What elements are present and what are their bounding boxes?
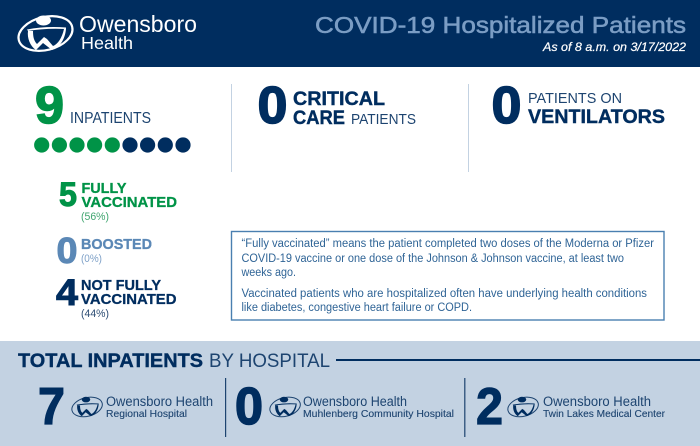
stat: fully vaccinated: FULLY [82,181,127,197]
hospital name: Owensboro Health [543,394,651,409]
hospital: muhlenberg [235,378,454,436]
stat: fully vaccinated [59,176,177,223]
hospital name [106,394,213,420]
hospital name: Regional Hospital [106,408,187,420]
stat: not fully vaccinated: VACCINATED [81,292,176,308]
stat: not fully vaccinated: 4 [56,272,78,313]
stat: inpatients [34,77,191,153]
stat: critical care: 0 [258,77,288,135]
stat: fully vaccinated: (56%) [81,211,109,223]
panel: total inpatients by hospital [0,341,700,446]
title: COVID-19 Hospitalized Patients [315,12,686,38]
hospital: regional: 7 [38,378,65,436]
callout: definition note: “Fully vaccinated” means the patient completed two doses of the Moderna or Pfizer [242,238,654,250]
stat: ventilators: PATIENTS ON [528,90,622,107]
icon: logo small [268,394,302,420]
hospital name: Muhlenberg Community Hospital [303,408,454,420]
logo wordmark [79,11,197,53]
icon: Owensboro Health logo [15,11,76,56]
stat: critical care: PATIENTS [351,111,416,128]
hospital: twin lakes: 2 [476,378,503,436]
callout: definition note [232,232,664,320]
stat: not fully vaccinated: NOT FULLY [81,278,161,294]
stat: inpatients: INPATIENTS [70,110,151,127]
hospital name [303,394,454,420]
stat: critical care: CRITICAL [293,88,385,110]
stat: ventilators [492,77,665,135]
callout: definition note: COVID-19 vaccine or one dose of the Johnson & Johnson vaccine, at least two [242,253,624,265]
logo wordmark: Owensboro [79,11,197,37]
panel heading: BY HOSPITAL [209,350,330,372]
panel heading [18,350,330,372]
stat: inpatients: 9 [35,77,64,135]
hospital name [543,394,665,420]
callout: definition note: like diabetes, congestive heart failure or COPD. [242,302,472,314]
panel heading: TOTAL INPATIENTS [18,350,203,372]
stat: boosted [56,230,152,271]
header banner [0,0,700,67]
hospital: twin lakes [476,378,665,436]
stat: ventilators: 0 [492,77,522,135]
hospital name: Twin Lakes Medical Center [543,408,665,420]
callout: definition note: weeks ago. [241,267,296,279]
stat: fully vaccinated: VACCINATED [82,195,177,211]
stat: boosted: 0 [56,230,78,271]
stat: critical care: CARE [293,107,345,129]
hospital name: Owensboro Health [106,394,213,409]
stat: boosted: (0%) [81,253,102,265]
stat: critical care [258,77,416,135]
stat: ventilators: VENTILATORS [528,106,665,128]
date subtitle: As of 8 a.m. on 3/17/2022 [542,42,687,54]
stat: fully vaccinated: 5 [59,176,77,214]
logo wordmark: Health [81,33,133,53]
icon: logo small [70,394,104,420]
hospital: muhlenberg: 0 [235,378,263,436]
stat: not fully vaccinated [56,272,176,320]
dot tally: 5 green, 4 navy [34,137,191,153]
icon: logo small [506,394,540,420]
hospital name: Owensboro Health [303,394,407,409]
stat: not fully vaccinated: (44%) [81,308,109,320]
stat: boosted: BOOSTED [81,237,152,253]
callout: definition note: Vaccinated patients who are hospitalized often have underlying health conditions [242,288,647,300]
hospital: regional [38,378,213,436]
